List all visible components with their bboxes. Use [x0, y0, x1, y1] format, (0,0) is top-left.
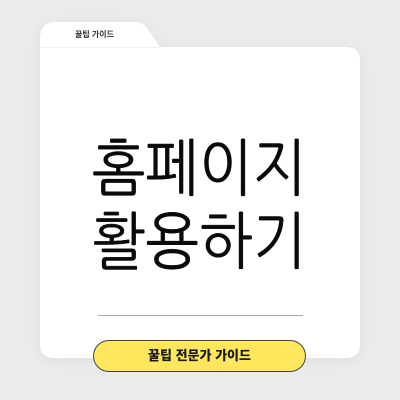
divider line [98, 315, 303, 316]
main title: 활용하기 [92, 210, 306, 272]
main title: 홈페이지 [92, 137, 306, 199]
main title [92, 137, 306, 272]
tab label: 꿀팁 가이드 [75, 30, 114, 39]
yellow pill button: 꿀팁 전문가 가이드 [148, 348, 251, 363]
yellow pill button [93, 340, 306, 372]
